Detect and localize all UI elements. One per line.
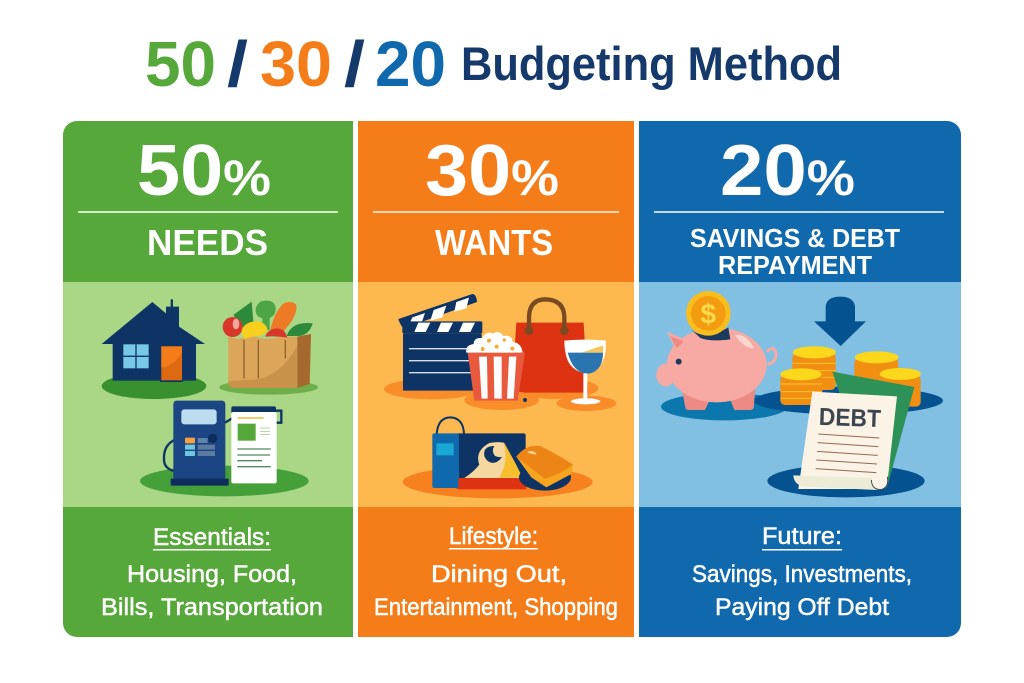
panel: needs: [63, 121, 353, 637]
panel: savings and debt: [639, 121, 961, 637]
title: Budgeting Method: [461, 37, 842, 90]
icon: house: [102, 299, 206, 399]
icon: popcorn: [464, 332, 539, 410]
title: 50: [145, 28, 216, 100]
savings heading: [690, 223, 900, 280]
savings description: Savings, Investments,: [692, 561, 912, 588]
savings illustrations: [656, 291, 943, 497]
needs description: [101, 524, 323, 621]
wants description: Entertainment, Shopping: [374, 594, 618, 621]
wants description: Lifestyle:: [449, 523, 538, 550]
title: /: [344, 28, 365, 100]
savings percentage: 20%: [720, 131, 855, 211]
needs heading: NEEDS: [147, 222, 268, 263]
wants percentage: 30%: [425, 131, 559, 211]
panel: wants: [358, 121, 634, 637]
icon: dining and shopping items: [403, 417, 593, 498]
icon: clapperboard: [384, 294, 482, 399]
icon: down arrow: [814, 297, 866, 346]
icon: shopping bag: [512, 299, 598, 399]
wants illustrations: [384, 294, 616, 498]
savings heading: REPAYMENT: [718, 250, 872, 280]
wants description: [374, 523, 618, 621]
savings description: Paying Off Debt: [715, 594, 889, 621]
title: [145, 28, 842, 100]
needs illustrations: [102, 299, 318, 496]
icon: piggy bank: [656, 291, 943, 420]
icon: debt document: [767, 372, 925, 497]
needs description: Essentials:: [153, 524, 271, 551]
icon: debt document: DEBT: [818, 404, 881, 433]
title: /: [227, 28, 248, 100]
icon: fuel pump and bill: [140, 401, 309, 496]
icon: piggy bank: $: [701, 298, 717, 329]
savings heading: SAVINGS & DEBT: [690, 223, 900, 253]
icon: grocery bag: [219, 301, 318, 395]
needs description: Housing, Food,: [127, 561, 297, 588]
icon: coin stacks: [780, 346, 921, 407]
title: 20: [375, 28, 446, 100]
savings description: [692, 523, 912, 621]
wants heading: WANTS: [435, 222, 553, 263]
wants description: Dining Out,: [431, 561, 567, 588]
needs description: Bills, Transportation: [101, 594, 323, 621]
icon: wine glass: [556, 340, 616, 411]
savings description: Future:: [762, 523, 842, 550]
needs percentage: 50%: [137, 131, 271, 211]
title: 30: [260, 28, 332, 100]
